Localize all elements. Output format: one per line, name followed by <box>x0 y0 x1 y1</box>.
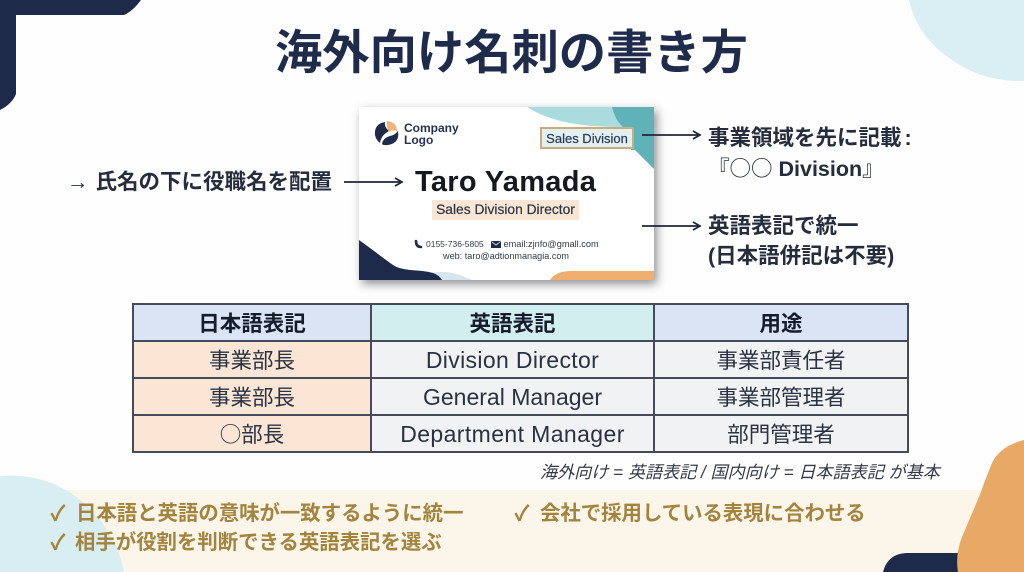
icon: phone <box>416 241 421 247</box>
annotation: name and title placement: → 氏名の下に役職名を配置 <box>67 170 332 194</box>
checklist item 2: ✓ <box>51 532 65 554</box>
row 1 English <box>372 342 653 377</box>
highlighted division label: Sales Division <box>546 131 628 146</box>
table header: Japanese <box>134 305 370 340</box>
row 1 <box>134 342 370 377</box>
annotation: division first <box>708 126 912 183</box>
card decorative shapes <box>359 107 654 280</box>
row 3: 部長 <box>241 423 284 447</box>
row 2 English: General Manager <box>423 384 602 410</box>
annotation: English unified: 英語表記で統一 <box>708 214 859 238</box>
table header: usage: 用途 <box>759 312 802 336</box>
row 2 usage <box>655 379 907 414</box>
table header: English: 英語表記 <box>469 312 556 336</box>
bottom tinted band <box>0 490 1024 572</box>
title: 海外向け名刺の書き方 <box>275 27 748 80</box>
annotation: English unified <box>708 214 894 268</box>
job title: Sales Division Director <box>436 202 575 217</box>
checklist item 1: ✓ <box>51 503 65 525</box>
name: Taro Yamada <box>415 166 596 198</box>
row 3: ○ <box>220 418 241 449</box>
row 1: 事業部長 <box>209 349 295 373</box>
company logo text: Company <box>404 121 459 135</box>
icon: company logo <box>375 121 398 145</box>
web address: web: taro@adtionmanagia.com <box>443 251 569 261</box>
checklist item 3: 会社で採用している表現に合わせる <box>540 503 866 525</box>
company logo text: Logo <box>404 132 433 146</box>
row 3 English: Department Manager <box>400 421 625 447</box>
table note: 海外向け = 英語表記 / 国内向け = 日本語表記 が基本 <box>540 463 940 482</box>
row 3 English <box>372 416 653 451</box>
checklist item 3: ✓ <box>515 503 529 525</box>
row 2 usage: 事業部管理者 <box>716 386 846 410</box>
table header: English <box>372 305 653 340</box>
table header: Japanese: 日本語表記 <box>198 312 306 336</box>
checklist item 1: 日本語と英語の意味が一致するように統一 <box>76 503 463 525</box>
comparison table <box>132 303 909 453</box>
email: email:zjnfo@gmall.com <box>504 239 599 249</box>
table header: usage <box>655 305 907 340</box>
highlighted division label <box>540 127 634 149</box>
row 1 English: Division Director <box>426 347 599 373</box>
annotation: English unified: (日本語併記は不要) <box>708 244 894 268</box>
row 2 <box>134 379 370 414</box>
row 3 usage: 部門管理者 <box>727 423 835 447</box>
annotation: division first: 『○○ Division』 <box>708 152 884 183</box>
annotation: division first: 事業領域を先に記載: <box>708 126 912 150</box>
row 1 usage <box>655 342 907 377</box>
row 3 usage <box>655 416 907 451</box>
checklist item 2: 相手が役割を判断できる英語表記を選ぶ <box>75 532 442 554</box>
row 2 English <box>372 379 653 414</box>
phone number: 0155-736-5805 <box>426 239 484 249</box>
row 3 <box>134 416 370 451</box>
business card <box>359 107 654 280</box>
icon: mail <box>491 241 501 248</box>
row 2: 事業部長 <box>209 386 295 410</box>
company logo text <box>404 121 459 146</box>
row 1 usage: 事業部責任者 <box>716 349 846 373</box>
